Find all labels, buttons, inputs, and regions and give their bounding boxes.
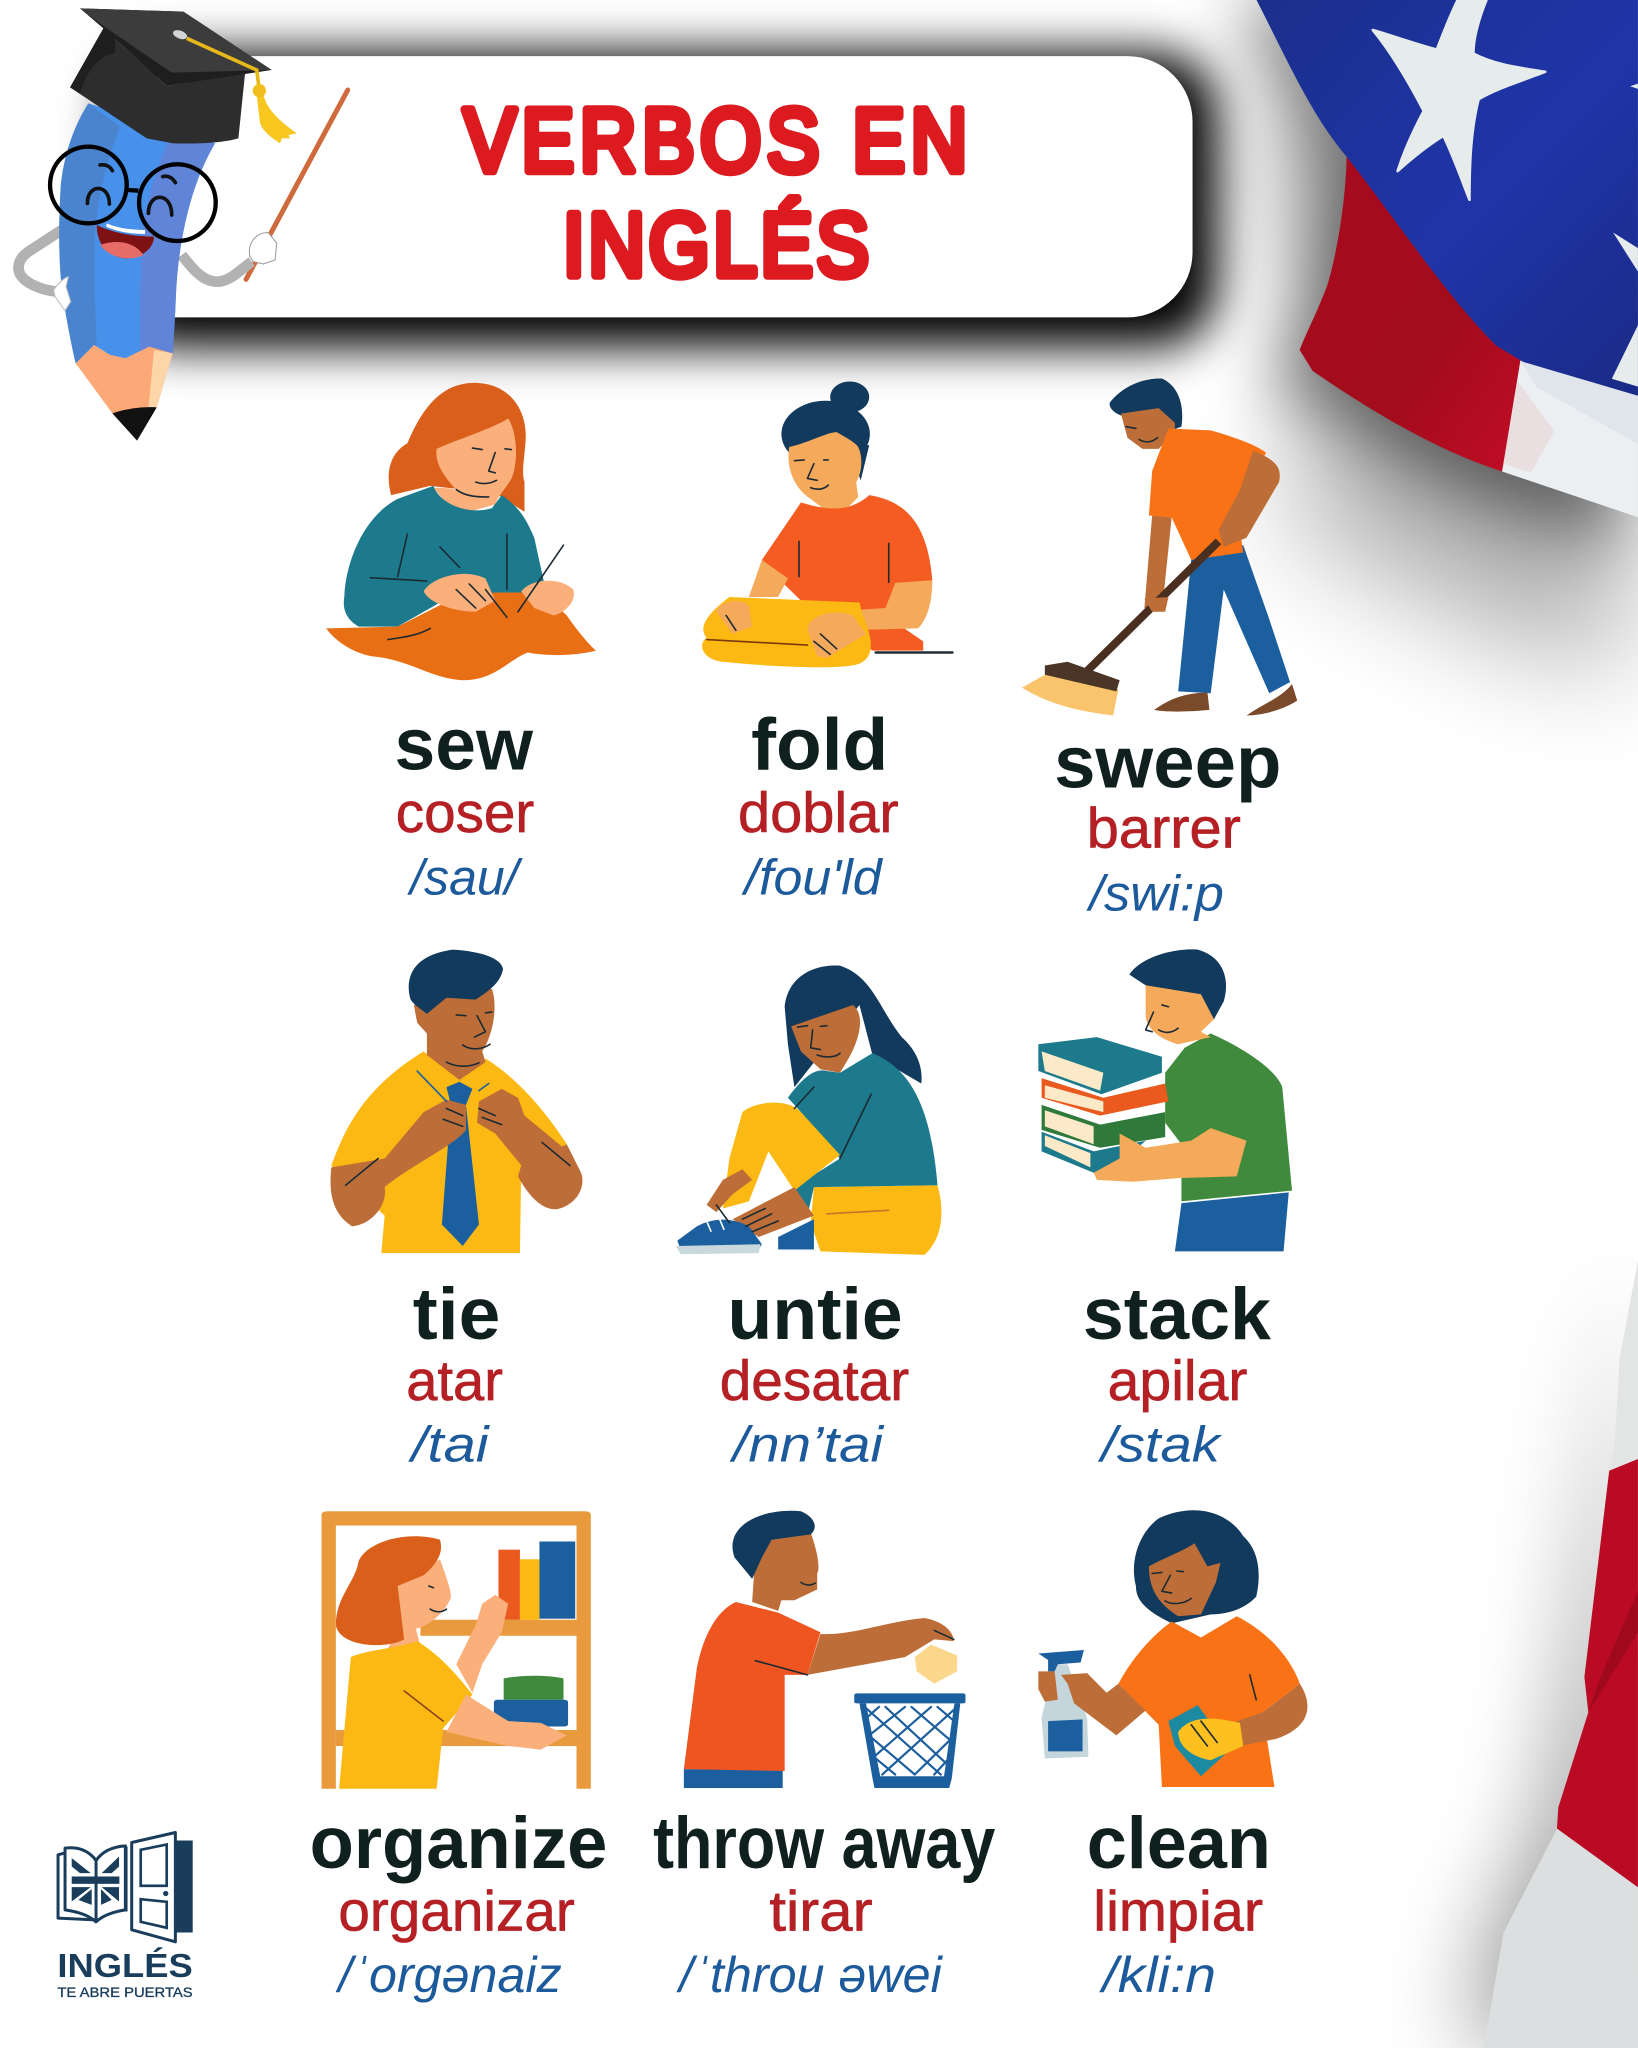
pronunciation: /stak [1098,1417,1222,1473]
pencil body [59,103,215,363]
star [1373,0,1545,200]
mouth [97,225,154,258]
translation: tirar [769,1879,873,1942]
pencil tip [76,345,173,441]
panel: tie [331,950,582,1473]
icon: open book with flag [58,1846,126,1922]
translation: limpiar [1093,1879,1263,1942]
illustration: tying a tie [331,950,582,1253]
word: fold [751,704,888,785]
word: untie [728,1274,903,1355]
title text: VERBOS EN [464,90,967,190]
mascot: blue pencil with cap, glasses and pointer [18,8,348,441]
translation: atar [406,1349,503,1412]
word: clean [1087,1803,1271,1884]
translation: apilar [1108,1349,1247,1412]
translation: doblar [738,781,899,844]
word: sweep [1054,723,1281,804]
word: sew [395,704,534,785]
title text: INGLÉS [563,195,869,295]
panel: untie [676,966,941,1473]
logo: Inglés te abre puertas [57,1833,193,2000]
translation: barrer [1087,797,1241,860]
translation: organizar [338,1879,575,1942]
illustration: sweeping [1022,378,1297,715]
illustration: stacking books [1038,949,1292,1251]
logo tagline: TE ABRE PUERTAS [57,1984,193,2000]
arms [18,230,252,292]
word: throw away [653,1803,996,1884]
pronunciation: /swi:p [1086,865,1224,921]
word: stack [1083,1274,1271,1355]
basket [854,1693,965,1788]
eyes [87,165,175,215]
panel: clean [1038,1510,1307,2003]
pronunciation: /ˈthrou əwei [676,1947,944,2003]
translation: desatar [720,1349,909,1412]
tassel [257,95,297,143]
pointer stick [246,90,348,279]
title banner [157,56,1193,317]
pronunciation: /nn’tai [729,1417,885,1473]
illustration: cleaning with spray [1038,1510,1307,1787]
illustration: sewing [326,383,596,680]
title text [464,90,967,295]
pronunciation: /tai [408,1417,491,1473]
hands [249,233,277,264]
word: organize [310,1803,607,1884]
illustration: untying a shoe [676,966,941,1255]
glasses [50,147,127,223]
word: tie [413,1274,500,1355]
illustration: throwing paper in a basket [684,1511,965,1788]
panel: throw away [653,1511,996,2003]
flag: bottom right corner [1484,1260,1638,2048]
illustration: folding [702,381,952,667]
pronunciation: /fou'ld [741,850,883,906]
icon: open door [132,1833,193,1942]
panel: sew [326,383,596,906]
logo wordmark: INGLÉS [57,1947,193,1985]
flag: top right corner [1257,0,1638,517]
panel: fold [702,381,952,906]
graduation cap [70,28,245,143]
panel: organize [310,1511,607,2003]
panel: sweep [1022,378,1297,921]
translation: coser [396,781,534,844]
pronunciation: /ˈorgənaiz [335,1947,562,2003]
pronunciation: /kli:n [1099,1947,1216,2003]
pronunciation: /sau/ [407,850,524,906]
illustration: organizing a shelf [322,1511,591,1789]
panel: stack [1038,949,1292,1473]
books [1038,1037,1168,1173]
